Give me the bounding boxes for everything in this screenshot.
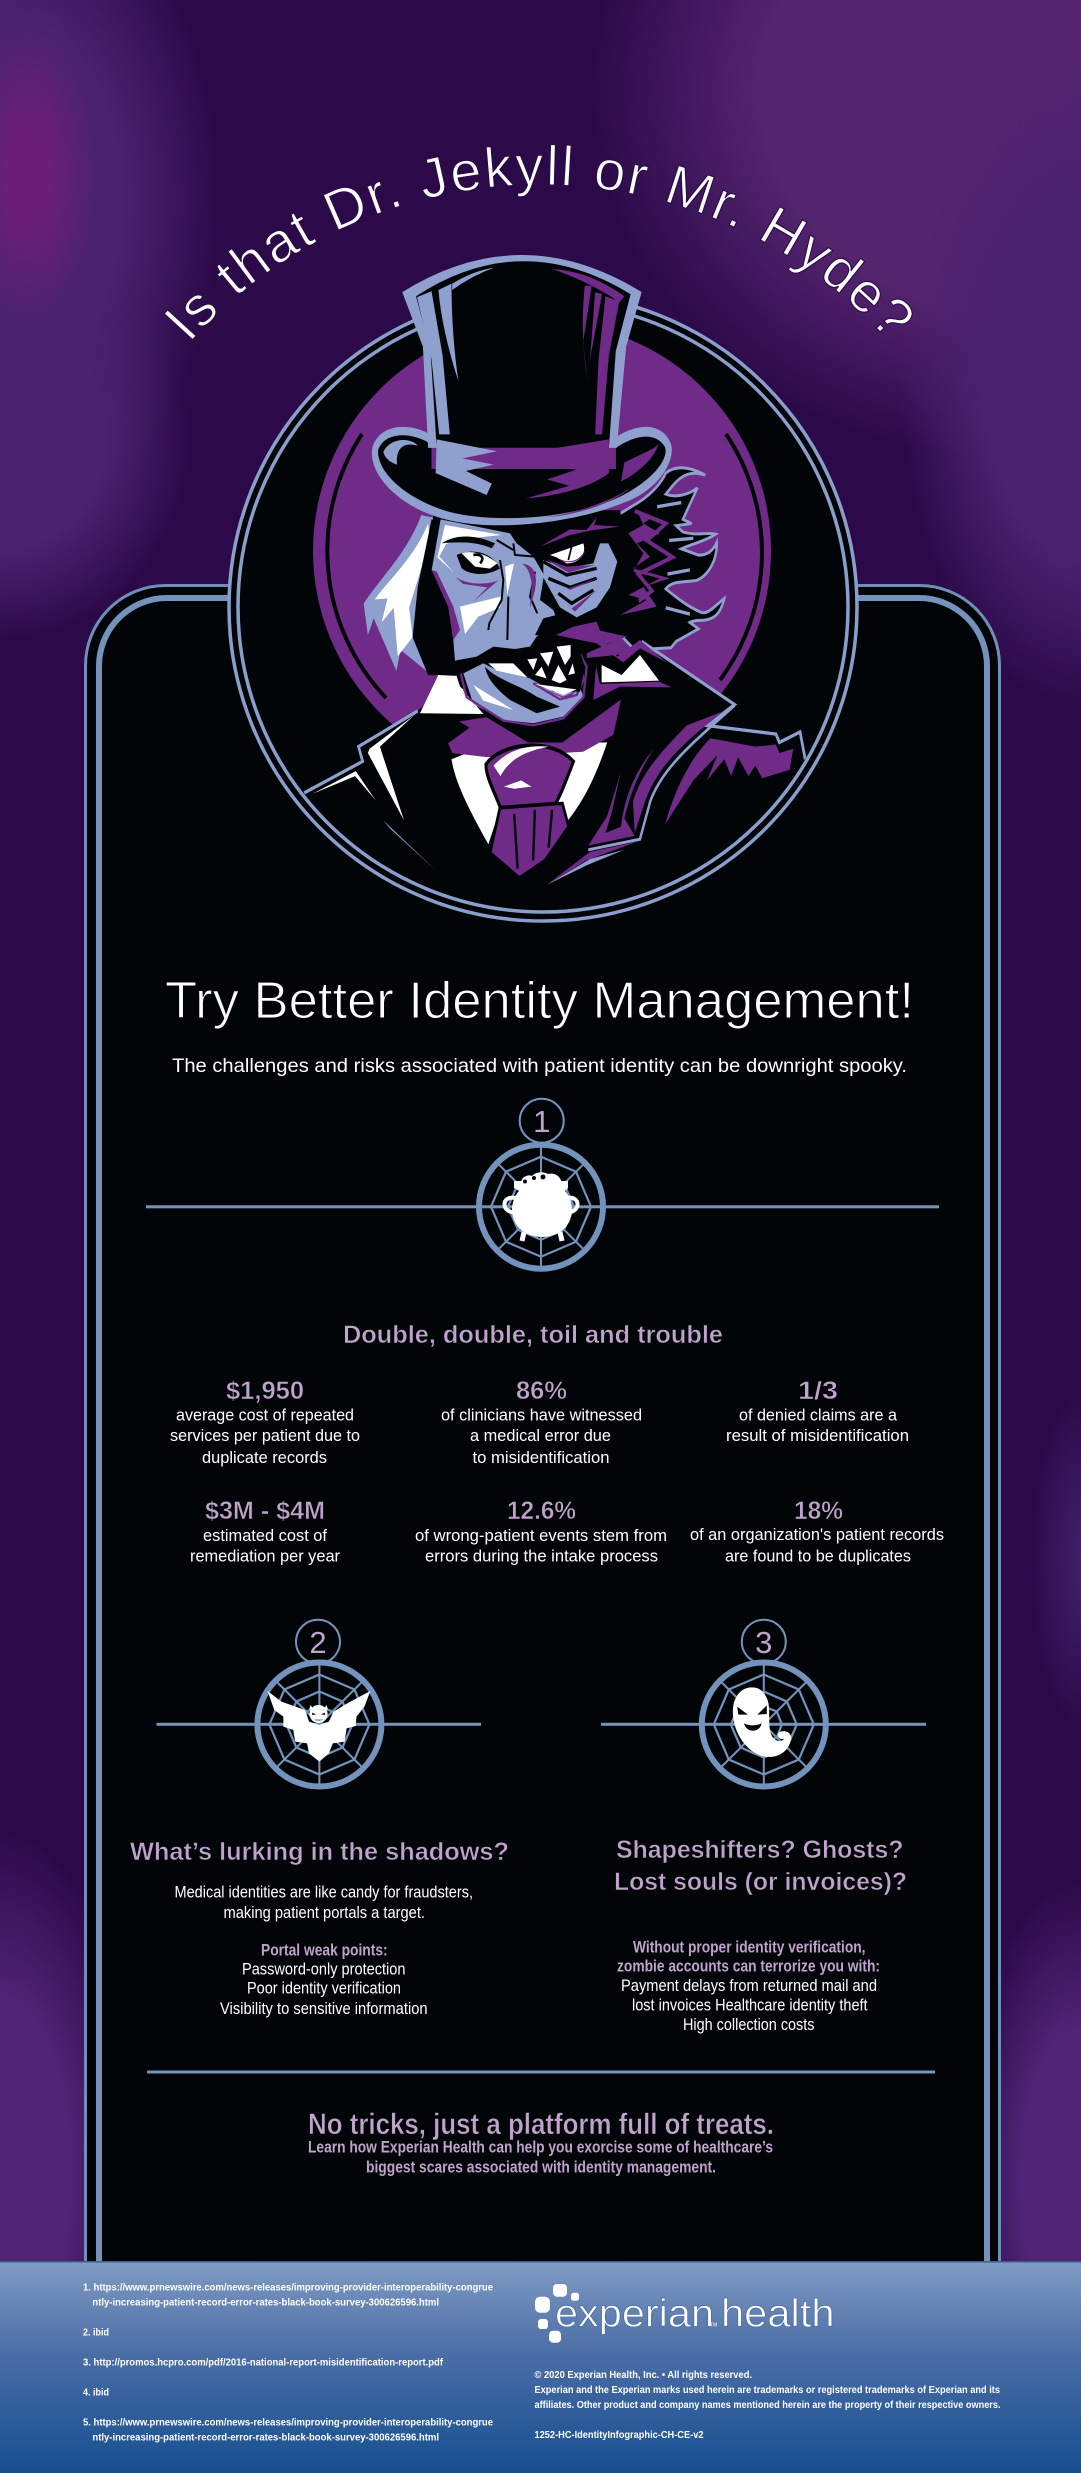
character body and hair [304, 468, 807, 910]
logo: experian health: experian [555, 2293, 714, 2336]
title on arc: Is that Dr. Jekyll or Mr. Hyde? [164, 145, 913, 339]
section 2 icon: web with bat [156, 1620, 481, 1786]
closing call to action: No tricks, just a platform full of treats. [308, 2108, 774, 2141]
section 3 body [617, 1938, 880, 2034]
section 2 body: Medical identities are like candy for fraudsters, [174, 1884, 473, 1902]
stat: $3M - $4M [190, 1497, 341, 1566]
section 2 body: Password-only protection [242, 1960, 406, 1978]
stat: $1,950: services per patient due to [170, 1427, 360, 1445]
footnotes: ntly-increasing-patient-record-error-rates-black-book-survey-300626596.html [92, 2298, 439, 2309]
logo: experian health: health [721, 2293, 834, 2336]
section 3 body: lost invoices Healthcare identity theft [632, 1996, 868, 2014]
left collar [420, 675, 483, 714]
legal text [534, 2370, 1001, 2441]
panel: black tombstone [86, 586, 1000, 2473]
stat: 12.6% [415, 1497, 667, 1566]
closing call to action [308, 2108, 774, 2176]
stat: $3M - $4M: remediation per year [190, 1548, 341, 1566]
stat: 86% [441, 1377, 642, 1467]
heading: try better identity management: Try Better Identity Management! [165, 972, 914, 1030]
stat: 12.6%: errors during the intake process [425, 1548, 658, 1566]
hyde eye and cheek [540, 517, 620, 617]
section 2 heading: What’s lurking in the shadows? [130, 1838, 509, 1866]
section 3 body: zombie accounts can terrorize you with: [617, 1958, 880, 1976]
section 2 body: Portal weak points: [261, 1942, 388, 1960]
section 3 icon: web with ghost [601, 1620, 926, 1786]
legal text: © 2020 Experian Health, Inc. • All rights reserved. [534, 2370, 752, 2381]
stat: $1,950: duplicate records [202, 1449, 327, 1467]
section 3 heading [614, 1836, 907, 1896]
mustache purple [556, 622, 667, 662]
right collar [593, 655, 672, 700]
stat: $1,950 [170, 1377, 360, 1467]
section 1 icon: web with cauldron: 1 [533, 1104, 550, 1139]
coat [304, 641, 807, 910]
hyde hair purple [620, 510, 670, 615]
stat: 1/3: 1/3 [798, 1377, 838, 1405]
stat: 12.6%: of wrong-patient events stem from [415, 1527, 667, 1545]
section 1 icon: web with cauldron [146, 1099, 939, 1269]
stat: 1/3 [726, 1377, 909, 1445]
closing call to action: Learn how Experian Health can help you exorcise some of healthcare’s [308, 2139, 773, 2157]
stat: 86%: 86% [516, 1377, 567, 1405]
cravat [448, 700, 621, 878]
stat: 1/3: of denied claims are a [739, 1407, 898, 1425]
closing call to action: biggest scares associated with identity management. [366, 2158, 716, 2176]
footnotes: 1. https://www.prnewswire.com/news-releases/improving-provider-interoperability-congrue [83, 2283, 493, 2294]
stat: 1/3: result of misidentification [726, 1427, 909, 1445]
face black backing [430, 510, 647, 727]
footnotes: 2. ibid [83, 2328, 109, 2339]
left hair [364, 515, 463, 675]
section 2 body: Visibility to sensitive information [220, 2000, 428, 2018]
stat: $3M - $4M: $3M - $4M [205, 1497, 325, 1525]
footnotes: 4. ibid [83, 2388, 109, 2399]
medallion with Jekyll and Hyde illustration [229, 255, 857, 921]
section 3 body: Without proper identity verification, [633, 1938, 866, 1956]
section 2 body: making patient portals a target. [224, 1904, 425, 1922]
legal text: affiliates. Other product and company names mentioned herein are the property of their respective owners. [534, 2400, 1001, 2411]
stat: 86%: of clinicians have witnessed [441, 1407, 642, 1425]
stat: $1,950: $1,950 [226, 1377, 304, 1405]
legal text: Experian and the Experian marks used herein are trademarks or registered trademarks of Experian and its [534, 2385, 1000, 2396]
faces: Jekyll and Hyde [420, 510, 672, 727]
footer band [0, 2261, 1081, 2473]
section 3 body: High collection costs [683, 2016, 814, 2034]
shirt [452, 742, 607, 844]
footnotes: ntly-increasing-patient-record-error-rates-black-book-survey-300626596.html [92, 2433, 439, 2444]
jekyll face [432, 519, 560, 661]
purple disc [313, 322, 771, 780]
subtitle: The challenges and risks associated with patient identity can be downright spooky. [172, 1055, 907, 1077]
hat crown [402, 255, 642, 448]
section 2 icon: web with bat: 2 [309, 1625, 327, 1660]
footnotes: 5. https://www.prnewswire.com/news-releases/improving-provider-interoperability-congrue [83, 2418, 493, 2429]
stat: $3M - $4M: estimated cost of [203, 1527, 327, 1545]
logo: experian health [535, 2284, 834, 2343]
icon: ghost [733, 1687, 791, 1757]
section 2 body: Poor identity verification [247, 1980, 401, 1998]
stat: 18%: 18% [794, 1497, 843, 1525]
stat: 18%: are found to be duplicates [725, 1548, 911, 1566]
section 3 icon: web with ghost: 3 [755, 1625, 772, 1660]
mouth and teeth [477, 643, 585, 699]
hat brim [372, 427, 672, 525]
section 2 body [174, 1884, 473, 2018]
logo: experian health: TM [710, 2323, 717, 2329]
section 3 body: Payment delays from returned mail and [621, 1977, 877, 1995]
footnotes: 3. http://promos.hcpro.com/pdf/2016-national-report-misidentification-report.pdf [83, 2358, 444, 2369]
medallion rings [229, 293, 857, 921]
hat band [436, 439, 609, 498]
icon: cauldron [504, 1172, 578, 1241]
stat: 18%: of an organization's patient records [690, 1526, 944, 1544]
stat: 86%: a medical error due [470, 1427, 611, 1445]
footnotes [83, 2283, 493, 2444]
top hat [372, 255, 672, 525]
chin [461, 654, 587, 725]
section 3 heading: Lost souls (or invoices)? [614, 1868, 907, 1896]
stat: 86%: to misidentification [472, 1449, 610, 1467]
section 1 heading: Double, double, toil and trouble [343, 1321, 723, 1349]
right wild hair [611, 468, 724, 650]
section 3 heading: Shapeshifters? Ghosts? [616, 1836, 904, 1864]
stat: 12.6%: 12.6% [507, 1497, 576, 1525]
stat: $1,950: average cost of repeated [176, 1407, 354, 1425]
stat: 18% [690, 1497, 944, 1566]
legal text: 1252-HC-IdentityInfographic-CH-CE-v2 [534, 2430, 704, 2441]
icon: bat [268, 1691, 370, 1762]
